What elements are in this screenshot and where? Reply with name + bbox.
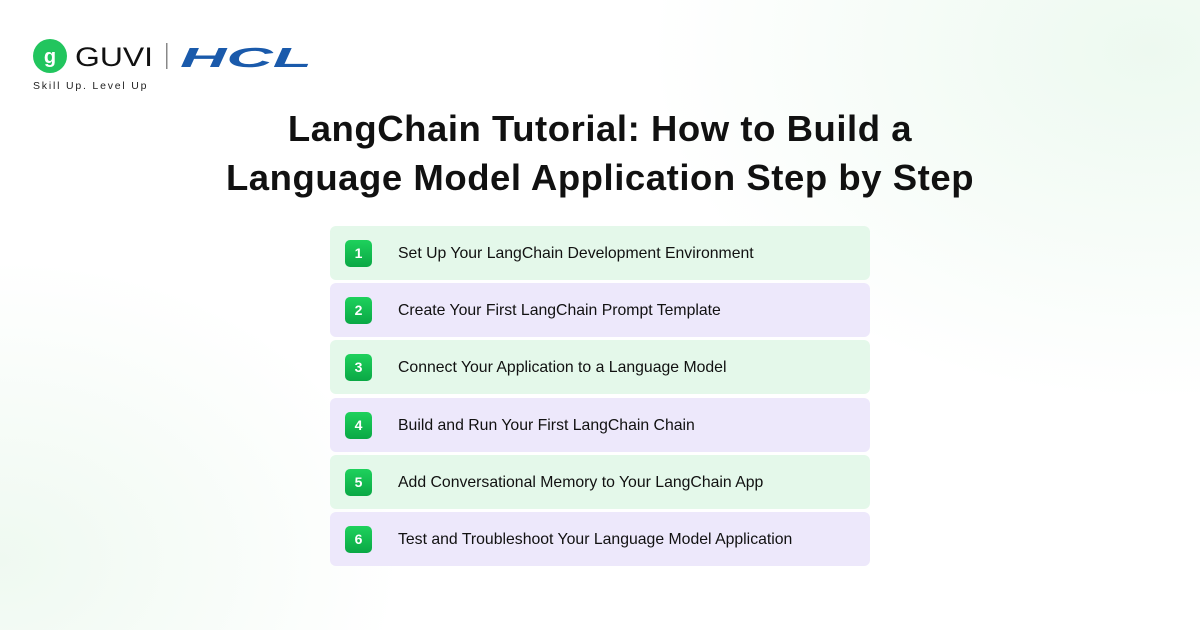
step 4: 4 bbox=[355, 417, 362, 433]
logo: g bbox=[44, 46, 56, 68]
step 5: Add Conversational Memory to Your LangChain App bbox=[398, 474, 763, 491]
logo: GUVI bbox=[75, 42, 153, 72]
step 3: 3 bbox=[355, 359, 362, 375]
logo: HCL bbox=[180, 42, 312, 73]
step 3 bbox=[330, 340, 870, 394]
step 1: 1 bbox=[355, 245, 362, 261]
step 6: 6 bbox=[355, 531, 362, 547]
step 2: Create Your First LangChain Prompt Template bbox=[398, 302, 721, 319]
title: LangChain Tutorial: How to Build a bbox=[288, 108, 912, 149]
step 2: 2 bbox=[355, 302, 362, 318]
logo: Skill Up. Level Up bbox=[33, 80, 148, 92]
step 1 bbox=[330, 226, 870, 280]
step 5: 5 bbox=[355, 474, 362, 490]
title: Language Model Application Step by Step bbox=[226, 157, 974, 198]
steps list bbox=[330, 226, 870, 566]
step 4: Build and Run Your First LangChain Chain bbox=[398, 417, 695, 434]
step 5 bbox=[330, 455, 870, 509]
step 4 bbox=[330, 398, 870, 452]
step 3: Connect Your Application to a Language Model bbox=[398, 359, 726, 376]
step 1: Set Up Your LangChain Development Environment bbox=[398, 245, 754, 262]
step 6: Test and Troubleshoot Your Language Model Application bbox=[398, 531, 792, 548]
step 6 bbox=[330, 512, 870, 566]
step 2 bbox=[330, 283, 870, 337]
title bbox=[226, 108, 974, 198]
logo bbox=[33, 39, 312, 92]
